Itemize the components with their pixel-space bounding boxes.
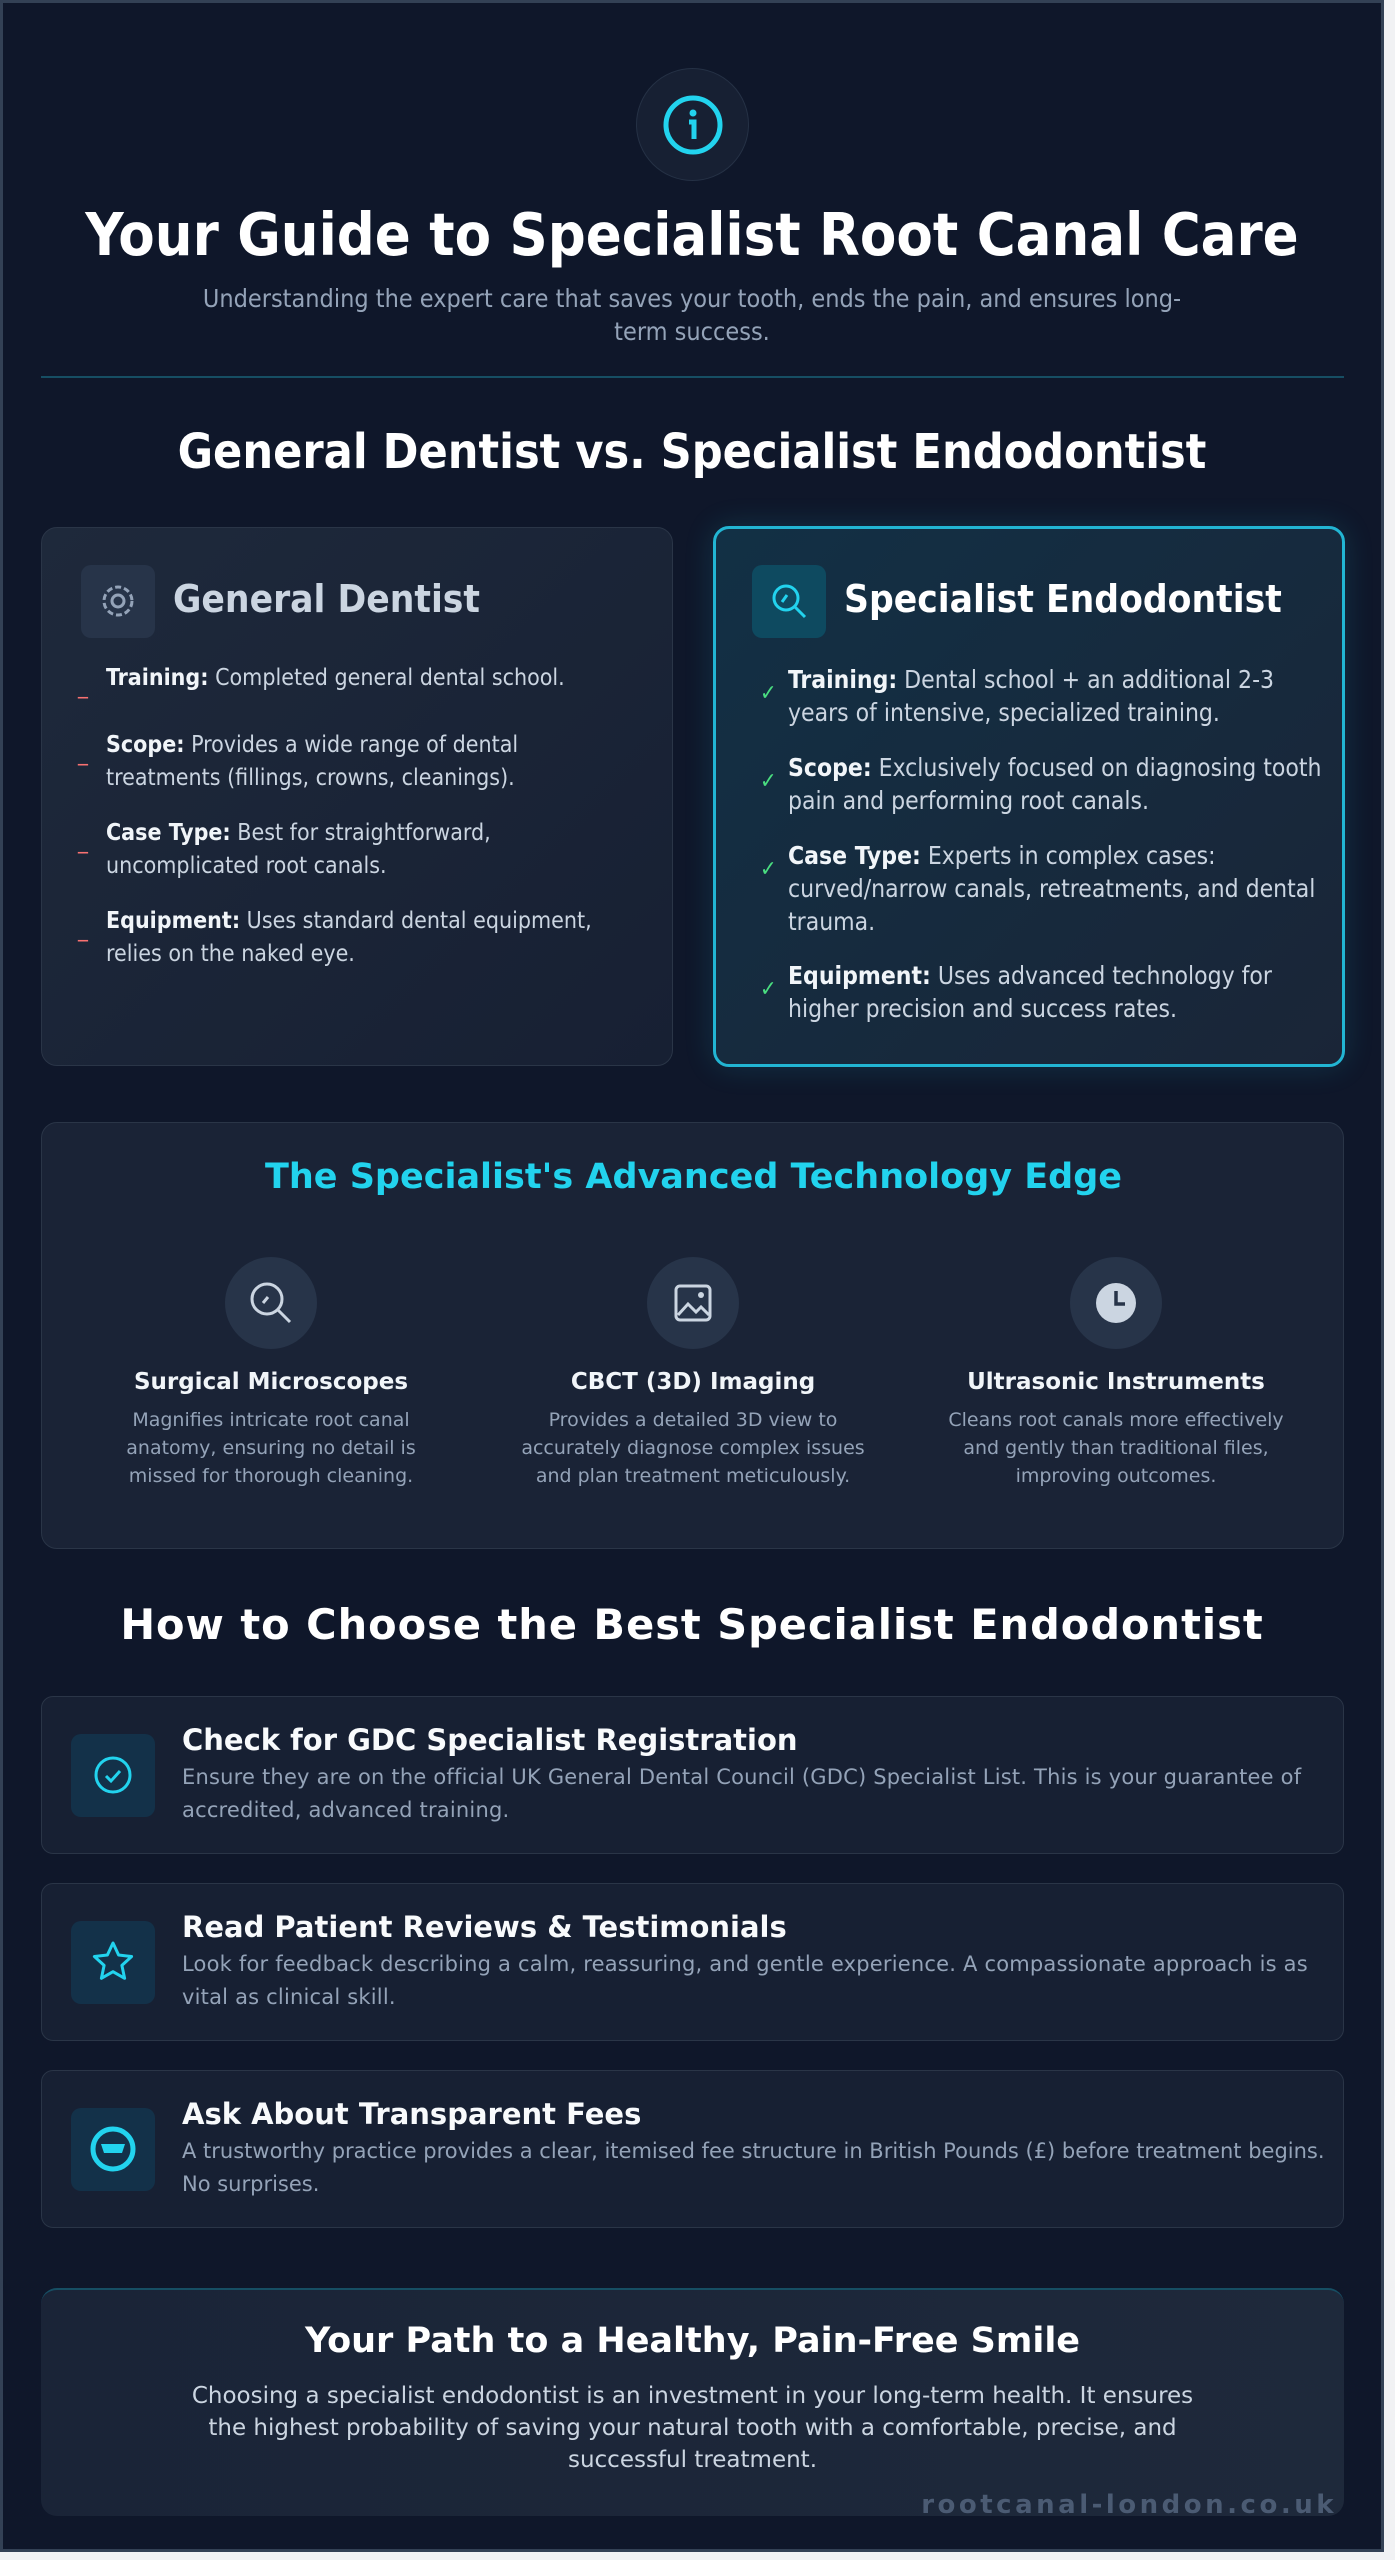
- list: specialist points: Scope: Exclusively focused on diagnosing tooth pain and performing root canals.: [788, 753, 1321, 815]
- text: conclusion: Choosing a specialist endodontist is an investment in your long-term health. It ensures the highest probability of saving your natural tooth with a comfortable, precise, and successful treatment.: [192, 2383, 1193, 2473]
- list: specialist points: ✓: [760, 977, 777, 1002]
- list: general dentist points: _: [78, 829, 88, 854]
- panel: conclusion: [41, 2288, 1344, 2516]
- item: GDC registration: Check for GDC Specialist Registration: [182, 1723, 798, 1757]
- icon: star: [71, 1921, 155, 2004]
- icon: info circle: [636, 68, 749, 181]
- item: GDC registration: [41, 1696, 1344, 1854]
- tech: CBCT: CBCT (3D) Imaging: [571, 1369, 815, 1395]
- list: general dentist points: _: [78, 917, 88, 942]
- list: general dentist points: [78, 665, 592, 967]
- list: specialist points: Case Type: Experts in complex cases: curved/narrow canals, retreatments, and dental trauma.: [788, 841, 1315, 936]
- list: specialist points: Training: Dental school + an additional 2-3 years of intensive, specialized training.: [788, 665, 1274, 727]
- icon: fee badge: [71, 2108, 155, 2191]
- tech: CBCT: [521, 1257, 865, 1487]
- item: GDC registration: Ensure they are on the official UK General Dental Council (GDC) Specialist List. This is your guarantee of accredited, advanced training.: [182, 1765, 1301, 1822]
- panel: technology edge: [41, 1122, 1344, 1549]
- tech: microscopes: Surgical Microscopes: [134, 1369, 408, 1395]
- list: specialist points: ✓: [760, 681, 777, 706]
- item: reviews: Look for feedback describing a calm, reassuring, and gentle experience. A compassionate approach is as vital as clinical skill.: [182, 1952, 1308, 2009]
- heading: comparison: General Dentist vs. Specialist Endodontist: [178, 424, 1206, 480]
- title: Your Guide to Specialist Root Canal Care: [85, 200, 1299, 269]
- list: specialist points: ✓: [760, 857, 777, 882]
- list: specialist points: [760, 665, 1321, 1023]
- item: fees: A trustworthy practice provides a clear, itemised fee structure in British Pounds (£) before treatment begins. No surprises.: [182, 2139, 1325, 2196]
- item: fees: [41, 2070, 1344, 2228]
- heading: conclusion: Your Path to a Healthy, Pain-Free Smile: [305, 2321, 1080, 2361]
- list: general dentist points: Equipment: Uses standard dental equipment, relies on the naked eye.: [106, 908, 592, 967]
- tech: ultrasonic: Ultrasonic Instruments: [967, 1369, 1265, 1395]
- tech: microscopes: Magnifies intricate root canal anatomy, ensuring no detail is missed for thorough cleaning.: [126, 1409, 416, 1487]
- list: specialist points: ✓: [760, 769, 777, 794]
- list: specialist points: Equipment: Uses advanced technology for higher precision and success rates.: [788, 961, 1272, 1023]
- tech: ultrasonic: Cleans root canals more effectively and gently than traditional files, improving outcomes.: [948, 1409, 1284, 1487]
- tech: ultrasonic: [948, 1257, 1284, 1487]
- panel: general dentist: [41, 527, 673, 1066]
- tech: microscopes: [126, 1257, 416, 1487]
- icon: magnifier: [752, 565, 826, 638]
- icon: gear: [81, 565, 155, 638]
- panel: specialist endodontist: [713, 526, 1345, 1067]
- list: general dentist points: _: [78, 741, 88, 766]
- watermark: rootcanal-london.co.uk: [921, 2490, 1337, 2520]
- subtitle: Understanding the expert care that saves your tooth, ends the pain, and ensures long-term success.: [203, 284, 1181, 346]
- item: reviews: [41, 1883, 1344, 2041]
- item: fees: Ask About Transparent Fees: [182, 2097, 641, 2131]
- heading: technology: The Specialist's Advanced Technology Edge: [265, 1157, 1122, 1197]
- list: general dentist points: _: [78, 674, 88, 699]
- tech: CBCT: Provides a detailed 3D view to accurately diagnose complex issues and plan treatment meticulously.: [521, 1409, 865, 1487]
- list: general dentist points: Scope: Provides a wide range of dental treatments (fillings, crowns, cleanings).: [106, 732, 518, 791]
- item: reviews: Read Patient Reviews & Testimonials: [182, 1910, 787, 1944]
- list: general dentist points: Training: Completed general dental school.: [106, 665, 565, 691]
- list: general dentist points: Case Type: Best for straightforward, uncomplicated root canals.: [106, 820, 491, 879]
- heading: specialist: Specialist Endodontist: [844, 577, 1282, 622]
- heading: how to choose: How to Choose the Best Specialist Endodontist: [120, 1600, 1264, 1649]
- heading: general dentist: General Dentist: [173, 577, 480, 622]
- icon: check circle: [71, 1734, 155, 1817]
